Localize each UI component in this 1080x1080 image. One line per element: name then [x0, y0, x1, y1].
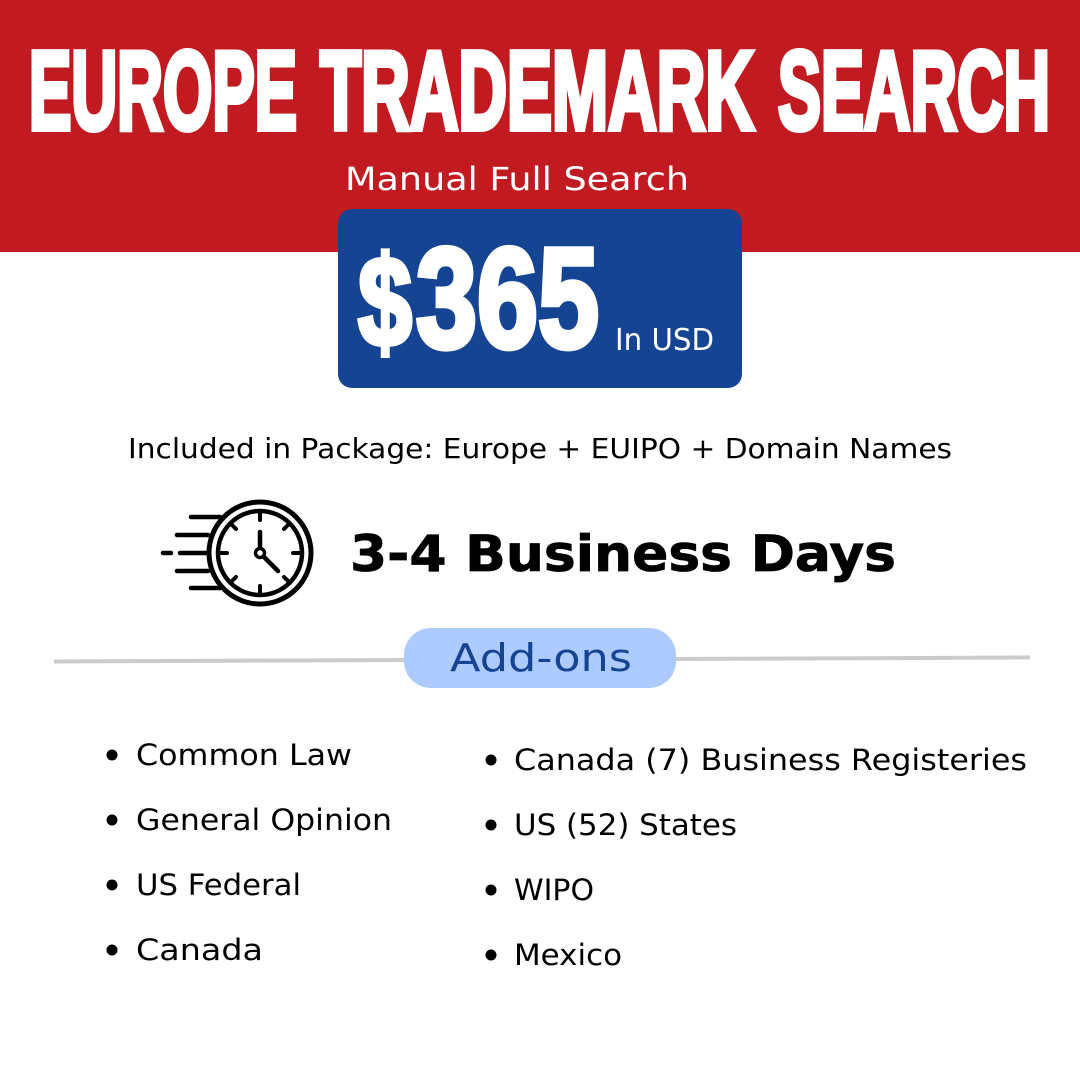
add-ons divider: Add-ons	[450, 636, 632, 680]
add-ons list: right column: US (52) States	[514, 808, 737, 842]
price box: $	[358, 231, 412, 374]
package description: Included in Package: Europe + EUIPO + Domain Names	[128, 432, 952, 465]
price box: In USD	[615, 323, 714, 358]
add-ons list: right column: Canada (7) Business Registeries	[514, 743, 1027, 777]
header banner	[0, 0, 1080, 252]
add-ons list: left column: General Opinion	[136, 803, 392, 837]
add-ons divider	[54, 628, 1030, 688]
add-ons list: left column	[106, 738, 392, 967]
subtitle: Manual Full Search	[345, 160, 689, 198]
add-ons list: right column	[486, 743, 1027, 972]
price box	[338, 209, 742, 388]
add-ons list: left column: US Federal	[136, 868, 301, 902]
price box: 365	[416, 219, 599, 378]
add-ons list: left column: Canada	[136, 933, 263, 967]
title: EUROPE	[29, 29, 297, 153]
add-ons list: right column: WIPO	[514, 873, 594, 907]
icon: fast clock	[163, 502, 311, 604]
add-ons list: right column: Mexico	[514, 938, 622, 972]
add-ons list: left column: Common Law	[136, 738, 352, 772]
title: TRADEMARK	[320, 29, 754, 153]
delivery time: 3-4 Business Days	[350, 525, 896, 583]
